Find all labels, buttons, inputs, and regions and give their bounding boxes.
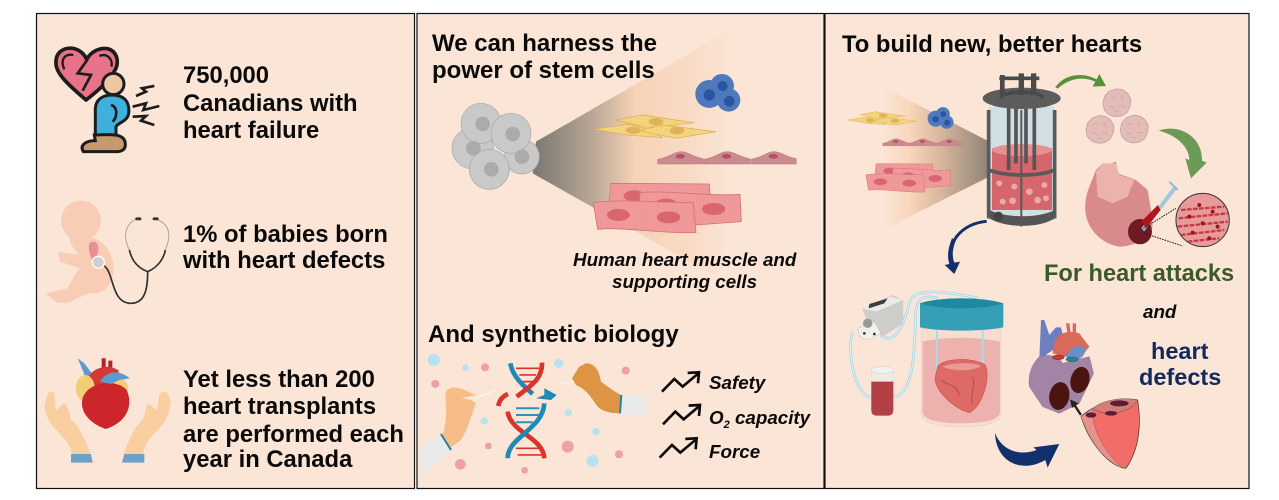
text: less than 200 transplants: year in Canada: [183, 446, 353, 473]
arrow: green small: [1055, 74, 1106, 89]
panel: building new hearts: [825, 14, 1249, 488]
list: engineered improvements: Force: [709, 441, 760, 462]
icons: trend arrows: [660, 372, 700, 458]
panel: heart disease burden: [36, 14, 414, 488]
text: 750,000 Canadians with heart failure: Canadians with: [183, 90, 358, 117]
cell: pink endothelial: [658, 152, 796, 164]
arrow: green large: [1159, 129, 1207, 178]
perfusion pump: [851, 292, 979, 397]
diagram: stem cells differentiating: [452, 28, 796, 277]
text: less than 200 transplants: are performed each: [183, 421, 404, 448]
list: engineered improvements: 2: [723, 419, 730, 431]
arrow: navy large: [995, 433, 1059, 468]
heart with injection: [1085, 162, 1229, 247]
text: 1% of babies born with heart defects: 1% of babies born: [183, 221, 388, 248]
caption: heart muscle cells: supporting cells: [612, 271, 757, 292]
text: for heart attacks: For heart attacks: [1044, 261, 1234, 287]
anatomical heart with defect: [1029, 320, 1094, 413]
cell: heart muscle: [593, 183, 741, 233]
heading: synthetic biology: And synthetic biology: [428, 321, 679, 348]
text: and: and: [1143, 301, 1177, 322]
beaker with blood: [871, 367, 894, 416]
illustration: DNA editing: [421, 354, 646, 475]
text: heart defects: defects: [1139, 364, 1221, 390]
diagram: perfused heart and patch: [851, 238, 1139, 468]
icon: heart held in hands: [44, 358, 171, 463]
organoid spheres: [1086, 89, 1148, 143]
jar with heart: [920, 298, 1003, 427]
arrow: navy curving down (tip): [945, 238, 960, 274]
text: 750,000 Canadians with heart failure: heart failure: [183, 117, 319, 144]
caption: heart muscle cells: Human heart muscle and: [573, 249, 797, 270]
text: less than 200 transplants: heart transplants: [183, 393, 376, 420]
text: 1% of babies born with heart defects: with heart defects: [182, 247, 385, 274]
heading: build new hearts: To build new, better hearts: [842, 31, 1142, 58]
panel: stem cells and synthetic biology: [417, 14, 824, 488]
heading: stem cells: power of stem cells: [432, 57, 655, 84]
list: engineered improvements: capacity: [730, 407, 812, 428]
text: 750,000 Canadians with heart failure: 750,000: [183, 62, 269, 89]
icon: fetus and stethoscope: [46, 201, 169, 303]
text: heart defects: heart: [1151, 338, 1209, 364]
icon: broken heart and person in pain: [56, 48, 159, 152]
list: engineered improvements: O: [709, 407, 724, 428]
cell: blue cluster: [695, 74, 740, 112]
bioreactor: [983, 73, 1061, 227]
text: less than 200 transplants: Yet less than 200: [183, 366, 375, 393]
engineered ventricle patch: [1081, 399, 1139, 468]
arrow: patch to heart: [1073, 403, 1081, 415]
heading: stem cells: We can harness the: [432, 30, 657, 57]
arrow: navy curving down (upper): [950, 221, 987, 258]
cells in bioreactor cone: [848, 107, 962, 192]
diagram: bioreactor and injected organoids: [848, 73, 1229, 258]
list: engineered improvements: Safety: [709, 372, 767, 393]
cell: yellow fibroblasts: [594, 115, 716, 138]
